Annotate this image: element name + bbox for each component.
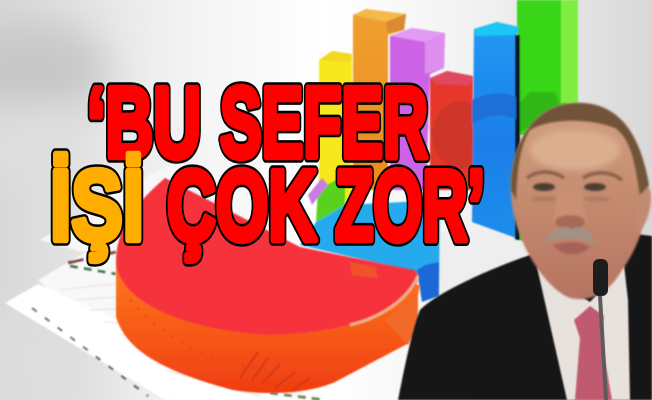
bar: green bbox=[515, 0, 578, 243]
bar: orange bbox=[353, 9, 406, 190]
white shirt bbox=[537, 265, 630, 400]
face bbox=[511, 103, 647, 299]
bar: red bbox=[430, 71, 492, 190]
bar chart: coloured 3D bars bbox=[319, 0, 578, 295]
headline line 1 bbox=[87, 67, 428, 179]
headline outline bbox=[50, 67, 485, 262]
microphone bbox=[593, 259, 608, 400]
bar: yellow bbox=[319, 51, 352, 200]
bar: purple bbox=[390, 28, 445, 190]
headline: ‘BU SEFER İŞİ ÇOK ZOR’ bbox=[50, 67, 485, 262]
nose and moustache bbox=[543, 190, 596, 254]
headline line 2: orange word: İŞİ bbox=[50, 150, 144, 262]
suit jacket bbox=[398, 234, 652, 400]
headline line 1: ‘BU bbox=[87, 67, 201, 179]
data sheets under the chart bbox=[5, 150, 340, 400]
forehead highlight bbox=[530, 130, 620, 170]
hair bbox=[511, 103, 649, 200]
bar: blue bbox=[472, 22, 520, 240]
headline line 2: red words bbox=[167, 150, 485, 262]
pie chart: red 3D slice bbox=[116, 178, 420, 393]
pie chart: blue and green slices behind the red slice bbox=[300, 175, 440, 302]
headline line 2: red words: ÇOK bbox=[167, 150, 317, 262]
floor bbox=[440, 232, 530, 295]
portrait: man in dark suit at microphone bbox=[398, 103, 652, 400]
headline line 2: red words: ZOR’ bbox=[335, 150, 485, 262]
headline line 1: SEFER bbox=[220, 67, 428, 179]
ear bbox=[636, 184, 651, 232]
pink patterned tie bbox=[574, 306, 612, 400]
eyes and brows bbox=[527, 172, 622, 202]
